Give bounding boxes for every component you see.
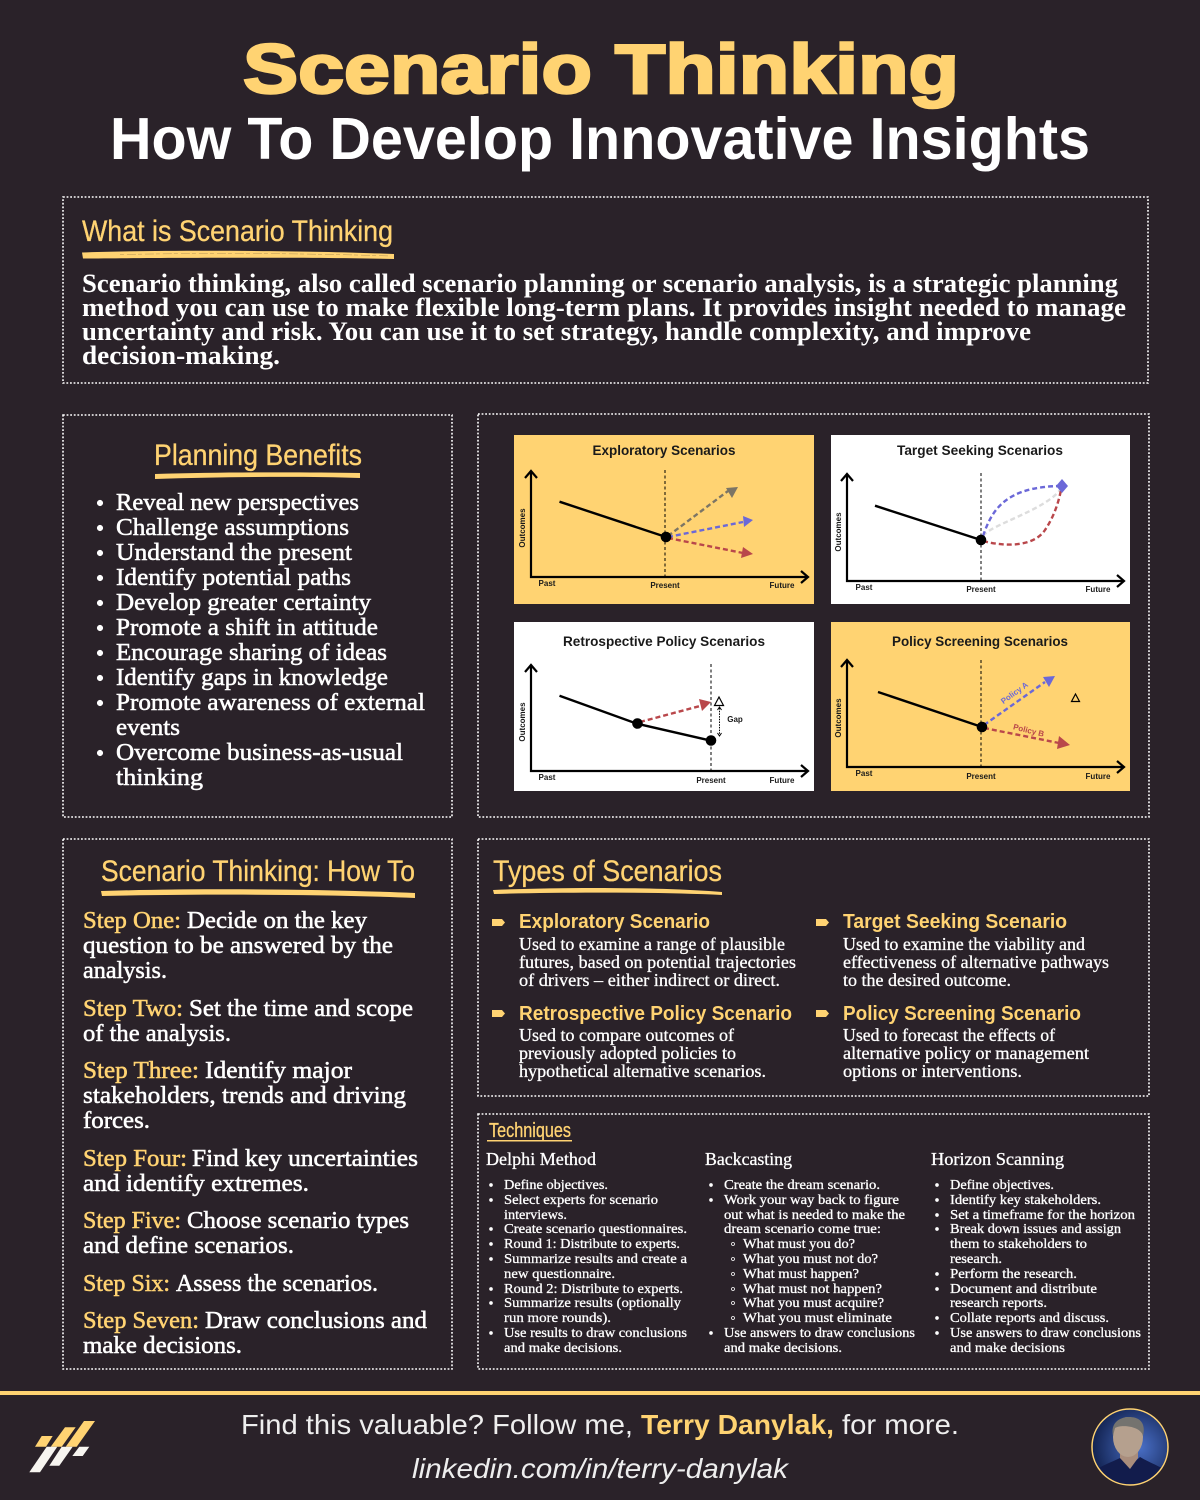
type: policy screening scenario: alternative policy or management [843, 1043, 1089, 1063]
step seven: Draw conclusions and [205, 1307, 427, 1334]
heading: planning benefits: Planning Benefits [154, 439, 362, 472]
title: How To Develop Innovative Insights [110, 106, 1090, 172]
column: backcasting: Work your way back to figure [724, 1193, 899, 1208]
column: delphi method: Select experts for scenario [504, 1193, 658, 1208]
chart: target seeking scenarios: Past [856, 583, 873, 592]
linkedin url: linkedin.com/in/terry-danylak [412, 1453, 790, 1484]
chart: retrospective policy scenarios: Gap [727, 715, 743, 724]
chart: policy screening scenarios: Policy A [999, 680, 1030, 706]
column: horizon scanning [931, 1149, 1141, 1356]
type: policy screening scenario [816, 1003, 1089, 1081]
type: policy screening scenario: Used to forecast the effects of [843, 1025, 1055, 1045]
column: horizon scanning: Identify key stakeholders. [950, 1193, 1101, 1208]
column: backcasting: What must not happen? [743, 1282, 882, 1297]
type: target seeking scenario: to the desired outcome. [843, 970, 1011, 990]
step two [83, 995, 413, 1047]
column: horizon scanning: Document and distribute [950, 1282, 1097, 1297]
step six: Step Six: [83, 1270, 170, 1297]
step seven: make decisions. [83, 1332, 242, 1359]
heading: techniques: Techniques [489, 1120, 571, 1142]
icon: logo [29, 1421, 95, 1472]
chart: target seeking scenarios [831, 435, 1130, 604]
type: policy screening scenario: Policy Screening Scenario [843, 1003, 1081, 1025]
benefits list: Identify gaps in knowledge [116, 664, 388, 691]
column: backcasting: What must happen? [743, 1267, 859, 1282]
column: horizon scanning: and make decisions [950, 1341, 1065, 1356]
step one: analysis. [83, 957, 167, 984]
step three: Identify major [205, 1057, 352, 1084]
type: policy screening scenario: options or interventions. [843, 1061, 1022, 1081]
definition text [82, 269, 1126, 370]
chart: exploratory scenarios: Past [539, 579, 556, 588]
column: backcasting: and make decisions. [724, 1341, 842, 1356]
heading: scenario thinking how to [101, 855, 415, 898]
benefits list: Overcome business-as-usual [116, 739, 403, 766]
icon: avatar portrait [1090, 1409, 1172, 1490]
column: horizon scanning: research reports. [950, 1296, 1047, 1311]
step five: Choose scenario types [187, 1207, 409, 1234]
step one: Decide on the key [187, 907, 368, 934]
column: delphi method: run more rounds). [504, 1311, 611, 1326]
benefits list: thinking [116, 764, 203, 791]
step seven: Step Seven: [83, 1307, 199, 1334]
step three: stakeholders, trends and driving [83, 1082, 406, 1109]
chart: exploratory scenarios: Present [650, 581, 680, 590]
column: delphi method: and make decisions. [504, 1341, 622, 1356]
chart: policy screening scenarios: Policy Screening Scenarios [892, 634, 1068, 649]
chart: policy screening scenarios: Outcomes [834, 698, 843, 738]
column: horizon scanning: Use answers to draw conclusions [950, 1326, 1141, 1341]
chart: exploratory scenarios: Outcomes [518, 508, 527, 548]
panel: scenario charts [478, 414, 1149, 817]
benefits list: Develop greater certainty [116, 589, 372, 616]
panel: planning benefits [63, 415, 452, 817]
step four [83, 1145, 418, 1197]
chart: exploratory scenarios: Future [770, 581, 795, 590]
type: exploratory scenario: of drivers – either indirect or direct. [519, 970, 780, 990]
chart: retrospective policy scenarios: Outcomes [518, 702, 527, 742]
chart: retrospective policy scenarios: Retrospective Policy Scenarios [563, 634, 765, 649]
column: backcasting: Backcasting [705, 1149, 792, 1169]
type: target seeking scenario: Used to examine the viability and [843, 934, 1085, 954]
step seven [83, 1307, 427, 1359]
benefits list: Reveal new perspectives [116, 489, 359, 516]
step six: Assess the scenarios. [176, 1270, 378, 1297]
type: exploratory scenario: futures, based on potential trajectories [519, 952, 796, 972]
step one: Step One: [83, 907, 181, 934]
column: backcasting: out what is needed to make the [724, 1208, 905, 1223]
benefits list: Encourage sharing of ideas [116, 639, 387, 666]
step one [83, 907, 393, 984]
chart: target seeking scenarios: Outcomes [834, 512, 843, 552]
chart: exploratory scenarios: Exploratory Scenarios [592, 443, 736, 458]
chart: policy screening scenarios [831, 622, 1130, 791]
column: backcasting [705, 1149, 915, 1356]
heading: what is scenario thinking [82, 215, 394, 259]
panel: techniques [478, 1114, 1149, 1369]
column: backcasting: What you must eliminate [743, 1311, 892, 1326]
column: delphi method: Summarize results (optionally [504, 1296, 681, 1311]
benefits list: Identify potential paths [116, 564, 351, 591]
step two: of the analysis. [83, 1020, 231, 1047]
step two: Step Two: [83, 995, 183, 1022]
column: delphi method: Create scenario questionnaires. [504, 1222, 687, 1237]
column: delphi method: Round 2: Distribute to experts. [504, 1282, 683, 1297]
chart: retrospective policy scenarios: Past [539, 773, 556, 782]
definition text: method you can use to make flexible long-term plans. It provides insight needed to manage [82, 293, 1126, 322]
benefits list: events [116, 714, 180, 741]
benefits list: Promote a shift in attitude [116, 614, 378, 641]
heading: types of scenarios: Types of Scenarios [493, 855, 722, 888]
definition text: uncertainty and risk. You can use it to set strategy, handle complexity, and improve [82, 317, 1031, 346]
column: backcasting: What you must not do? [743, 1252, 878, 1267]
chart: retrospective policy scenarios: Present [696, 776, 726, 785]
step three [83, 1057, 406, 1134]
column: backcasting: Use answers to draw conclusions [724, 1326, 915, 1341]
benefits list: Promote awareness of external [116, 689, 425, 716]
benefits list [97, 489, 425, 791]
column: horizon scanning: research. [950, 1252, 1002, 1267]
benefits list: Challenge assumptions [116, 514, 349, 541]
chart: policy screening scenarios: Present [966, 772, 996, 781]
column: horizon scanning: Break down issues and assign [950, 1222, 1121, 1237]
step four: Find key uncertainties [192, 1145, 418, 1172]
panel: what is scenario thinking [63, 197, 1148, 383]
type: exploratory scenario: Exploratory Scenario [519, 911, 710, 933]
definition text: Scenario thinking, also called scenario planning or scenario analysis, is a strategic planning [82, 269, 1118, 298]
title: Scenario Thinking [243, 30, 959, 108]
definition text: decision-making. [82, 341, 280, 370]
type: target seeking scenario: effectiveness of alternative pathways [843, 952, 1109, 972]
step five: Step Five: [83, 1207, 181, 1234]
column: delphi method: Use results to draw conclusions [504, 1326, 687, 1341]
follow text: for more. [842, 1409, 959, 1440]
follow text [241, 1409, 959, 1440]
column: delphi method: Define objectives. [504, 1178, 608, 1193]
column: backcasting: What you must acquire? [743, 1296, 884, 1311]
heading: what is scenario thinking: What is Scenario Thinking [82, 215, 393, 248]
title [110, 30, 1090, 172]
step five [83, 1207, 409, 1259]
column: horizon scanning: Collate reports and discuss. [950, 1311, 1109, 1326]
column: delphi method: Round 1: Distribute to experts. [504, 1237, 680, 1252]
type: exploratory scenario [492, 911, 796, 990]
step three: forces. [83, 1107, 150, 1134]
step three: Step Three: [83, 1057, 199, 1084]
type: retrospective policy scenario: Retrospective Policy Scenario [519, 1003, 792, 1025]
step two: Set the time and scope [189, 995, 413, 1022]
footer [0, 1391, 1200, 1490]
column: backcasting: Create the dream scenario. [724, 1178, 880, 1193]
step five: and define scenarios. [83, 1232, 294, 1259]
step four: Step Four: [83, 1145, 187, 1172]
column: delphi method: interviews. [504, 1208, 567, 1223]
follow text: Find this valuable? Follow me, [241, 1409, 633, 1440]
panel: how to steps [63, 839, 452, 1369]
column: delphi method: Delphi Method [486, 1149, 596, 1169]
column: horizon scanning: Perform the research. [950, 1267, 1077, 1282]
chart: policy screening scenarios: Future [1086, 772, 1111, 781]
chart: retrospective policy scenarios: Future [770, 776, 795, 785]
column: horizon scanning: Define objectives. [950, 1178, 1054, 1193]
type: exploratory scenario: Used to examine a range of plausible [519, 934, 785, 954]
column: delphi method: new questionnaire. [504, 1267, 615, 1282]
panel: types of scenarios [478, 839, 1149, 1096]
column: backcasting: What must you do? [743, 1237, 855, 1252]
heading: scenario thinking how to: Scenario Thinking: How To [101, 855, 415, 888]
column: horizon scanning: Horizon Scanning [931, 1149, 1064, 1169]
step four: and identify extremes. [83, 1170, 309, 1197]
chart: exploratory scenarios [514, 435, 814, 604]
step six [83, 1270, 378, 1297]
column: horizon scanning: Set a timeframe for the horizon [950, 1208, 1135, 1223]
column: delphi method: Summarize results and create a [504, 1252, 688, 1267]
type: target seeking scenario [816, 911, 1109, 990]
type: retrospective policy scenario: hypothetical alternative scenarios. [519, 1061, 766, 1081]
type: retrospective policy scenario [492, 1003, 792, 1081]
type: target seeking scenario: Target Seeking Scenario [843, 911, 1067, 933]
type: retrospective policy scenario: previously adopted policies to [519, 1043, 736, 1063]
column: backcasting: dream scenario come true: [724, 1222, 881, 1237]
chart: policy screening scenarios: Policy B [1012, 722, 1045, 739]
follow text: Terry Danylak, [641, 1409, 834, 1440]
column: horizon scanning: them to stakeholders to [950, 1237, 1087, 1252]
chart: target seeking scenarios: Present [966, 585, 996, 594]
column: delphi method [486, 1149, 688, 1356]
step one: question to be answered by the [83, 932, 393, 959]
chart: target seeking scenarios: Future [1086, 585, 1111, 594]
benefits list: Understand the present [116, 539, 352, 566]
chart: retrospective policy scenarios [514, 622, 814, 791]
chart: target seeking scenarios: Target Seeking Scenarios [897, 443, 1063, 458]
type: retrospective policy scenario: Used to compare outcomes of [519, 1025, 734, 1045]
chart: policy screening scenarios: Past [856, 769, 873, 778]
